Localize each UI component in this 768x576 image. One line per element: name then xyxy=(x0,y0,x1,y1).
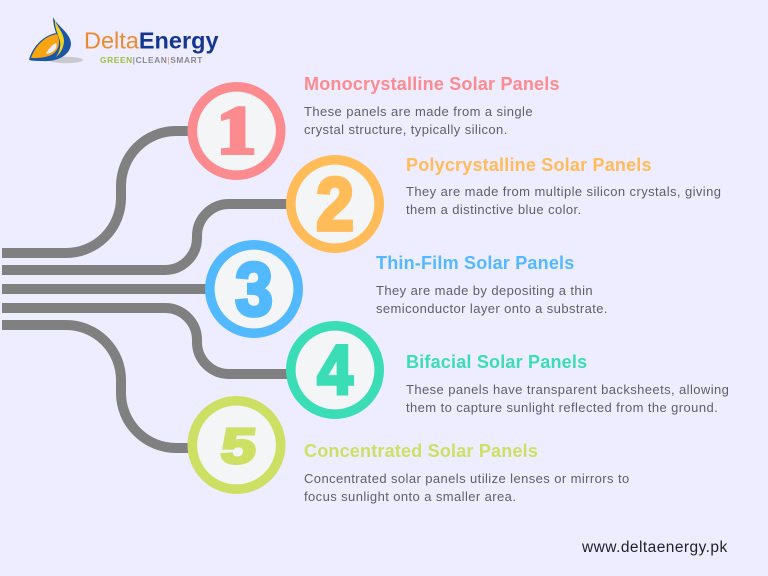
connector 5 xyxy=(2,325,192,448)
connector lines xyxy=(2,131,292,448)
text block: bifacial xyxy=(406,352,729,415)
description: polycrystalline: They are made from multiple silicon crystals, giving xyxy=(406,184,721,199)
description: bifacial: them to capture sunlight reflected from the ground. xyxy=(406,400,718,415)
heading: polycrystalline: Polycrystalline Solar Panels xyxy=(406,155,652,175)
heading: thin-film: Thin-Film Solar Panels xyxy=(376,253,574,273)
circle 3: 3 xyxy=(235,248,273,332)
text block: polycrystalline xyxy=(406,155,721,217)
heading: concentrated: Concentrated Solar Panels xyxy=(304,441,538,461)
description: monocrystalline xyxy=(304,104,533,137)
logo flame icon xyxy=(29,17,71,61)
circle 5: 5 xyxy=(219,418,259,474)
circle 3 xyxy=(210,245,298,333)
description: polycrystalline: them a distinctive blue color. xyxy=(406,202,582,217)
connector 1 xyxy=(2,131,192,253)
description: concentrated xyxy=(304,471,630,504)
connector 3 xyxy=(2,284,210,294)
description: monocrystalline: These panels are made from a single xyxy=(304,104,533,119)
heading: monocrystalline: Monocrystalline Solar Panels xyxy=(304,74,560,94)
description: thin-film: semiconductor layer onto a substrate. xyxy=(376,301,608,316)
text block: thin-film xyxy=(376,253,608,316)
description: concentrated: focus sunlight onto a smaller area. xyxy=(304,489,516,504)
description: bifacial: These panels have transparent backsheets, allowing xyxy=(406,382,729,397)
description: bifacial xyxy=(406,382,729,415)
connector 4 xyxy=(2,308,292,374)
logo shadow xyxy=(49,57,83,63)
heading: bifacial: Bifacial Solar Panels xyxy=(406,352,587,372)
circle 2 xyxy=(291,160,379,248)
text block: concentrated xyxy=(304,441,630,504)
website url: www.deltaenergy.pk xyxy=(582,539,728,556)
description: monocrystalline: crystal structure, typically silicon. xyxy=(304,122,508,137)
text block: monocrystalline xyxy=(304,74,560,137)
description: concentrated: Concentrated solar panels utilize lenses or mirrors to xyxy=(304,471,630,486)
circle 2: 2 xyxy=(316,163,354,247)
logo xyxy=(29,17,219,65)
circle 5 xyxy=(192,401,281,489)
description: polycrystalline xyxy=(406,184,721,217)
connector 2 xyxy=(2,204,292,270)
description: thin-film xyxy=(376,283,608,316)
circle 1 xyxy=(192,87,281,175)
circle 4 xyxy=(291,326,379,414)
circle 1: 1 xyxy=(217,93,256,168)
logo tagline: GREEN|CLEAN|SMART xyxy=(100,55,203,65)
logo wordmark: DeltaEnergy xyxy=(84,28,219,54)
circle 4: 4 xyxy=(317,332,353,410)
description: thin-film: They are made by depositing a thin xyxy=(376,283,593,298)
